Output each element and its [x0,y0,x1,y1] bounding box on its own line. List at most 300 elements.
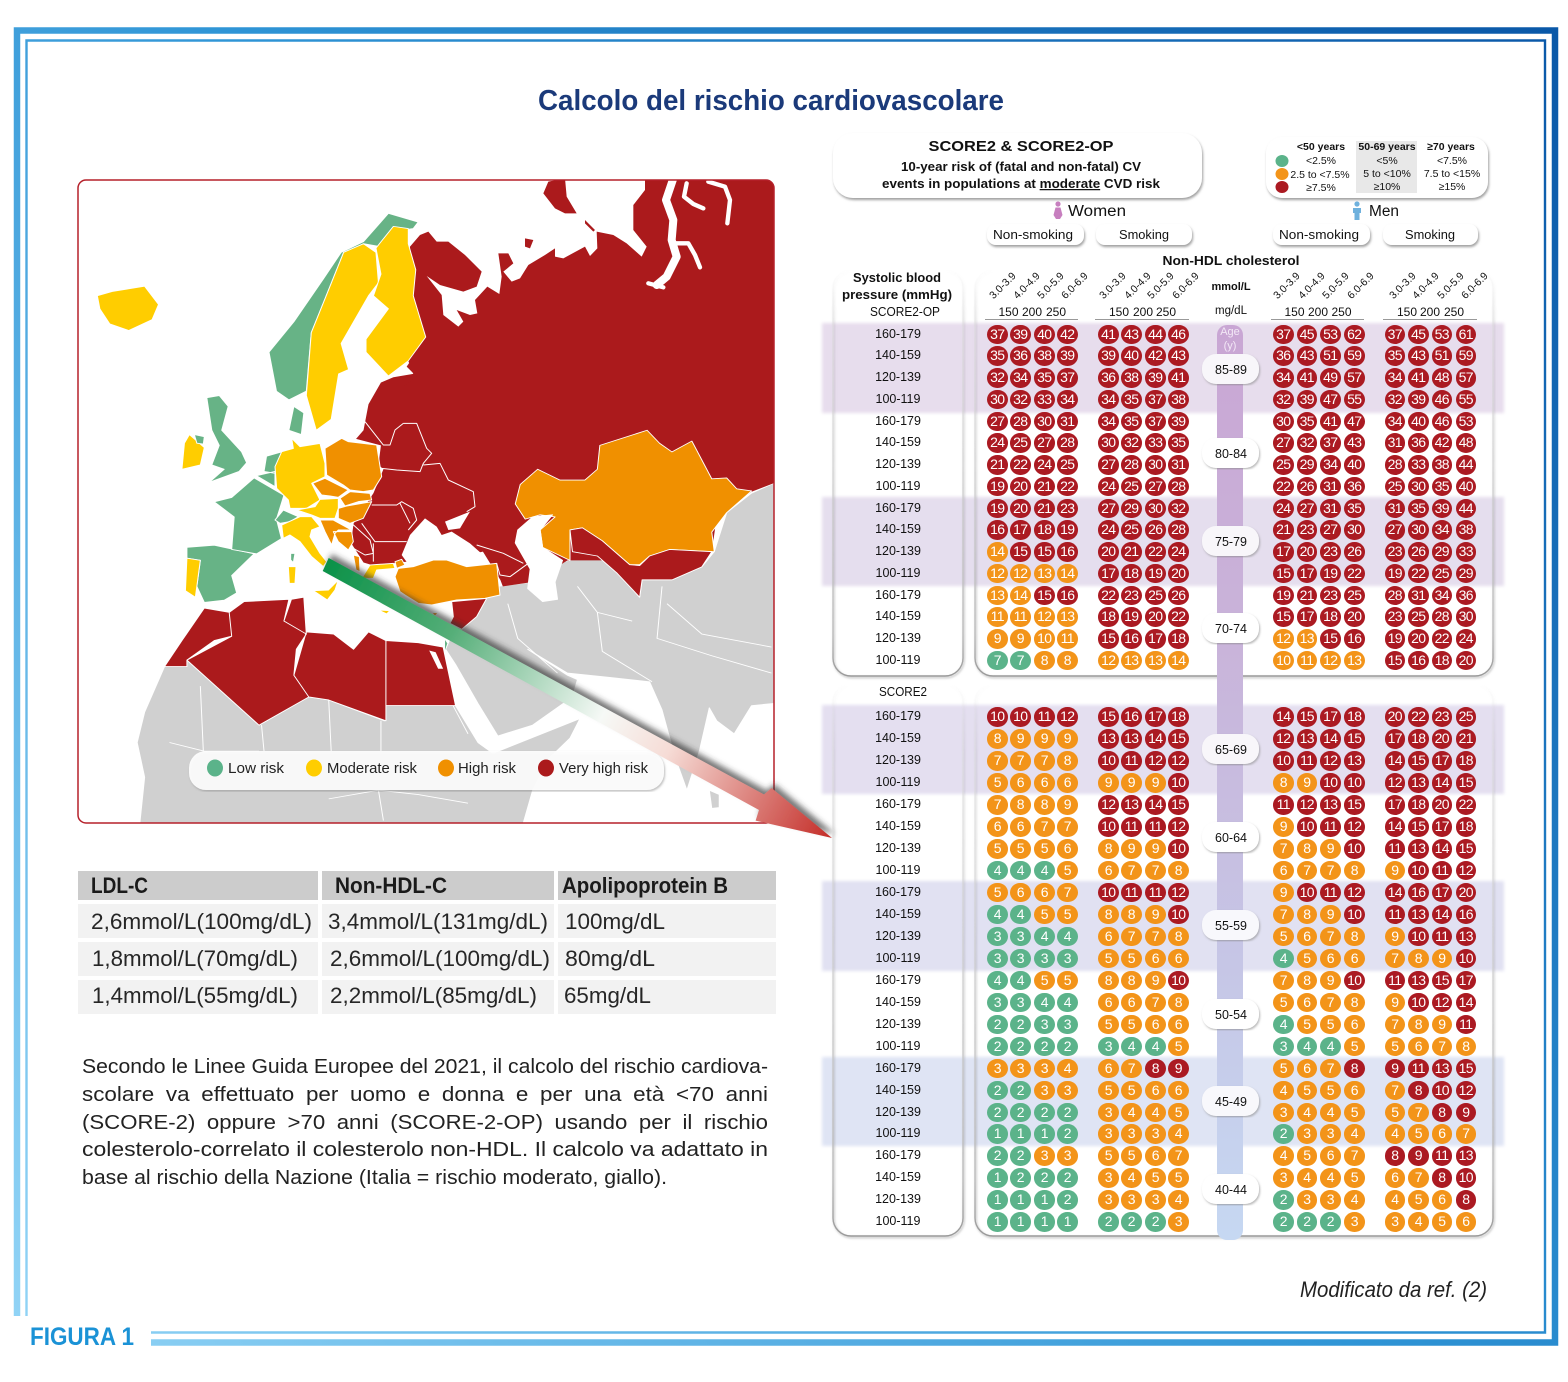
row: age 65-69, 160-179: 20 [1388,708,1402,724]
row: age 60-64, 100-119: 12 [1459,862,1473,878]
row: age 60-64, 120-139: 13 [1411,840,1425,856]
row: age 75-79, 140-159: 19 [1060,521,1074,537]
map legend: Very high risk [559,760,648,777]
row: age 70-74, 120-139: 19 [1388,630,1402,646]
row: age 65-69, 120-139: 10 [1276,752,1290,768]
row: age 55-59, 120-139: 8 [1175,928,1182,944]
row: age 50-54, 160-179 [875,971,1476,990]
row: age 40-44, 140-159: 140-159 [875,1170,921,1184]
row: age 85-89, 140-159 [875,346,1476,366]
row: age 75-79, 120-139: 33 [1459,543,1473,559]
row: age 80-84, 140-159: 43 [1347,434,1361,450]
row: age 60-64, 140-159: 6 [994,818,1001,834]
row: age 50-54, 160-179: 8 [1128,972,1135,988]
row: age 50-54, 120-139: 8 [1415,1016,1422,1032]
cholesterol column axis: 4.0-4.9 [1122,270,1154,302]
row: age 50-54, 100-119: 4 [1303,1038,1310,1054]
row: age 85-89, 160-179: 39 [1013,326,1027,342]
row: age 45-49, 160-179: 8 [1152,1060,1159,1076]
row: age 65-69, 120-139: 10 [1101,752,1115,768]
SCORE2 label: SCORE2 [879,685,927,699]
row: age 85-89, 100-119: 38 [1171,391,1185,407]
Corsica [291,554,294,562]
row: age 45-49, 100-119: 6 [1438,1125,1445,1141]
row: age 65-69, 140-159: 140-159 [875,731,921,745]
row: age 70-74, 100-119: 20 [1459,652,1473,668]
row: age 60-64, 100-119 [876,861,1476,880]
row: age 65-69, 120-139 [875,751,1476,771]
row: age 50-54, 140-159: 8 [1351,994,1358,1010]
cholesterol column axis: 4.0-4.9 [1296,270,1328,302]
cholesterol column axis: 3.0-3.9 [1097,270,1129,302]
row: age 50-54, 160-179: 10 [1347,972,1361,988]
row: age 55-59, 140-159: 4 [1017,906,1024,922]
row: age 75-79, 140-159: 26 [1148,521,1162,537]
row: age 65-69, 160-179: 10 [990,708,1004,724]
row: age 80-84, 160-179: 30 [1037,412,1051,428]
row: age 50-54, 100-119: 8 [1462,1038,1469,1054]
row: age 60-64, 140-159: 11 [1324,818,1337,834]
row: age 65-69, 120-139: 14 [1388,752,1402,768]
row: age 80-84, 100-119: 31 [1323,478,1337,494]
map: European risk regions [97,178,777,825]
row: age 65-69, 160-179: 11 [1038,708,1051,724]
row: age 70-74, 120-139: 15 [1101,630,1115,646]
row: age 75-79, 140-159: 140-159 [875,522,921,536]
row: age 65-69, 160-179: 15 [1101,708,1115,724]
row: age 55-59, 160-179: 17 [1435,884,1449,900]
row: age 60-64, 160-179: 8 [1017,796,1024,812]
row: age 80-84, 120-139: 28 [1388,456,1402,472]
row: age 55-59, 140-159: 9 [1327,906,1334,922]
row: age 85-89, 120-139: 57 [1459,369,1473,385]
row: age 70-74, 140-159: 11 [991,608,1004,624]
row: age 80-84, 120-139: 25 [1276,456,1290,472]
cholesterol column axis: 250 [1444,305,1464,319]
lipid targets table: 2,6mmol/L(100mg/dL) [330,946,550,971]
Syria [450,598,487,629]
row: age 55-59, 140-159: 8 [1128,906,1135,922]
row: age 55-59, 100-119: 5 [1105,950,1112,966]
row: age 85-89, 140-159: 35 [1388,347,1402,363]
row: age 40-44, 120-139: 3 [1128,1191,1135,1207]
row: age 60-64, 100-119: 7 [1303,862,1310,878]
row: age 75-79, 160-179: 31 [1323,500,1337,516]
Central Asia red [570,528,712,597]
row: age 55-59, 100-119: 6 [1351,950,1358,966]
systolic pressure axis title: Systolic blood [853,271,941,285]
lipid targets table: Apolipoprotein B [562,873,728,898]
row: age 80-84, 120-139: 25 [1060,456,1074,472]
Kazakhstan [515,430,752,565]
row: age 45-49, 100-119: 2 [1280,1125,1287,1141]
row: age 40-44, 100-119: 6 [1462,1213,1469,1229]
row: age 50-54, 100-119: 4 [1128,1038,1135,1054]
row: age 60-64, 120-139: 5 [1017,840,1024,856]
chart header box: SCORE2 & SCORE2-OP [928,138,1114,155]
row: age 65-69, 100-119: 6 [1017,774,1024,790]
row: age 40-44, 160-179: 8 [1391,1147,1398,1163]
row: age 70-74, 140-159: 15 [1276,608,1290,624]
row: age 85-89, 140-159: 35 [990,347,1004,363]
risk colour legend: ≥10% [1374,181,1400,193]
explanatory paragraph [82,1055,768,1189]
row: age 70-74, 120-139: 12 [1276,630,1290,646]
row: age 60-64, 140-159: 9 [1280,818,1287,834]
row: age 40-44, 120-139: 1 [994,1191,1001,1207]
row: age 80-84, 120-139: 21 [990,456,1004,472]
risk colour legend [1266,137,1488,198]
grey land and southern Russia base [137,337,774,825]
row: age 75-79, 140-159: 21 [1276,521,1290,537]
row: age 60-64, 100-119: 7 [1128,862,1135,878]
row: age 50-54, 120-139: 6 [1351,1016,1358,1032]
explanatory paragraph: (SCORE-2) oppure >70 anni (SCORE-2-OP) usando per il rischio [82,1111,768,1134]
row: age 55-59, 160-179: 7 [1064,884,1071,900]
row: age 50-54, 140-159: 5 [1280,994,1287,1010]
row: age 65-69, 160-179: 15 [1300,708,1314,724]
row: age 50-54, 140-159: 7 [1327,994,1334,1010]
row: age 70-74, 120-139: 9 [1017,630,1024,646]
row: age 85-89, 140-159: 59 [1347,347,1361,363]
row: age 50-54, 160-179: 13 [1411,972,1425,988]
row: age 85-89, 100-119: 55 [1459,391,1473,407]
row: age 45-49, 160-179: 3 [994,1060,1001,1076]
lipid targets table: LDL-C [91,873,148,898]
row: age 45-49, 140-159: 8 [1415,1082,1422,1098]
row: age 80-84, 140-159: 32 [1300,434,1314,450]
row: age 75-79, 120-139: 26 [1347,543,1361,559]
row: age 45-49, 140-159: 6 [1152,1082,1159,1098]
row: age 65-69, 100-119: 9 [1303,774,1310,790]
row: age 75-79, 100-119: 15 [1276,565,1290,581]
row: age 55-59, 140-159: 11 [1388,906,1401,922]
row: age 40-44, 100-119: 4 [1415,1213,1422,1229]
row: age 85-89, 160-179: 46 [1171,326,1185,342]
row: age 45-49, 100-119: 4 [1351,1125,1358,1141]
row: age 60-64, 120-139: 9 [1128,840,1135,856]
row: age 50-54, 140-159: 8 [1175,994,1182,1010]
cholesterol column axis: mmol/L [1211,281,1251,293]
row: age 70-74, 100-119: 11 [1300,652,1313,668]
row: age 80-84, 140-159: 31 [1388,434,1402,450]
row: age 75-79, 160-179: 19 [990,500,1004,516]
row: age 40-44, 160-179: 7 [1175,1147,1182,1163]
row: age 60-64, 100-119: 11 [1435,862,1448,878]
row: age 70-74, 100-119: 18 [1435,652,1449,668]
row: age 55-59, 120-139: 7 [1128,928,1135,944]
row: age 40-44, 160-179: 6 [1152,1147,1159,1163]
row: age 40-44, 120-139: 1 [1041,1191,1048,1207]
row: age 75-79, 100-119: 12 [990,565,1004,581]
row: age 45-49, 120-139: 4 [1327,1104,1334,1120]
row: age 50-54, 140-159: 9 [1391,994,1398,1010]
row: age 45-49, 160-179: 8 [1351,1060,1358,1076]
row: age 80-84, 140-159: 33 [1148,434,1162,450]
row: age 45-49, 140-159: 3 [1064,1082,1071,1098]
shaded age bands [822,323,1504,1146]
row: age 45-49, 140-159: 5 [1105,1082,1112,1098]
row: age 45-49, 120-139: 7 [1415,1104,1422,1120]
row: age 60-64, 160-179: 22 [1459,796,1473,812]
row: age 80-84, 120-139: 30 [1148,456,1162,472]
row: age 50-54, 160-179: 15 [1435,972,1449,988]
row: age 70-74, 140-159: 13 [1060,608,1074,624]
row: age 65-69, 100-119: 100-119 [876,775,920,789]
row: age 65-69, 140-159: 9 [1041,730,1048,746]
row: age 55-59, 120-139: 4 [1041,928,1048,944]
row: age 65-69, 160-179: 18 [1171,708,1185,724]
row: age 40-44, 140-159: 2 [1064,1169,1071,1185]
row: age 40-44, 140-159: 4 [1327,1169,1334,1185]
row: age 85-89, 100-119: 30 [990,391,1004,407]
row: age 45-49, 160-179: 13 [1435,1060,1449,1076]
row: age 80-84, 100-119: 25 [1124,478,1138,494]
row: age 55-59, 100-119: 9 [1438,950,1445,966]
row: age 55-59, 120-139: 120-139 [875,929,921,943]
row: age 55-59, 160-179: 6 [1041,884,1048,900]
Portugal [185,558,200,597]
row: age 85-89, 160-179: 61 [1459,326,1473,342]
row: age 65-69, 120-139: 7 [1017,752,1024,768]
row: age 45-49, 100-119 [876,1124,1476,1144]
row: age 55-59, 100-119: 3 [1064,950,1071,966]
row: age 80-84, 160-179: 41 [1323,412,1337,428]
row: age 85-89, 160-179: 37 [1276,326,1290,342]
row: age 80-84, 140-159: 140-159 [875,435,921,449]
Germany [275,438,325,508]
risk colour legend: 2.5 to <7.5% [1290,169,1350,181]
row: age 50-54, 160-179: 9 [1152,972,1159,988]
row: age 50-54, 100-119: 2 [994,1038,1001,1054]
row: age 65-69, 120-139: 12 [1148,752,1162,768]
row: age 75-79, 120-139: 14 [990,543,1004,559]
row: age 85-89, 140-159: 51 [1435,347,1449,363]
row: age 80-84, 160-179: 35 [1124,412,1138,428]
row: age 40-44, 100-119 [876,1212,1476,1232]
row: age 50-54, 160-179: 8 [1303,972,1310,988]
row: age 80-84, 160-179: 34 [1101,412,1115,428]
row: age 70-74, 120-139: 16 [1347,630,1361,646]
row: age 80-84, 100-119: 21 [1037,478,1051,494]
row: age 70-74, 120-139: 15 [1323,630,1337,646]
row: age 45-49, 100-119: 7 [1462,1125,1469,1141]
row: age 80-84, 100-119: 30 [1411,478,1425,494]
row: age 75-79, 120-139: 17 [1276,543,1290,559]
row: age 50-54, 100-119: 3 [1280,1038,1287,1054]
row: age 45-49, 100-119: 3 [1105,1125,1112,1141]
row: age 80-84, 100-119: 100-119 [876,479,920,493]
row: age 85-89, 100-119: 35 [1124,391,1138,407]
row: age 80-84, 120-139: 27 [1101,456,1115,472]
row: age 65-69, 100-119: 12 [1388,774,1402,790]
row: age 70-74, 160-179: 23 [1323,586,1337,602]
chart header box: 10-year risk of (fatal and non-fatal) CV [901,160,1142,174]
row: age 65-69, 140-159: 18 [1411,730,1425,746]
row: age 70-74, 160-179: 25 [1347,586,1361,602]
age group pills: 85-89 [1215,363,1247,377]
row: age 60-64, 160-179: 15 [1347,796,1361,812]
row: age 45-49, 120-139: 3 [1105,1104,1112,1120]
row: age 70-74, 140-159 [875,607,1476,627]
row: age 60-64, 140-159: 12 [1347,818,1361,834]
row: age 60-64, 100-119: 100-119 [876,863,920,877]
row: age 70-74, 120-139: 17 [1148,630,1162,646]
row: age 50-54, 100-119: 6 [1415,1038,1422,1054]
row: age 55-59, 100-119: 6 [1152,950,1159,966]
row: age 75-79, 160-179: 31 [1388,500,1402,516]
row: age 85-89, 140-159: 38 [1037,347,1051,363]
row: age 75-79, 120-139: 15 [1013,543,1027,559]
cholesterol column axis: 250 [1331,305,1352,319]
row: age 60-64, 140-159: 11 [1125,818,1138,834]
row: age 70-74, 140-159: 19 [1124,608,1138,624]
row: age 80-84, 160-179: 27 [990,412,1004,428]
explanatory paragraph: colesterolo-correlato il colesterolo non-HDL. Il calcolo va adattato in [82,1138,768,1161]
row: age 80-84, 120-139 [875,455,1476,475]
row: age 60-64, 160-179: 12 [1101,796,1115,812]
row: age 65-69, 140-159: 9 [1017,730,1024,746]
row: age 60-64, 140-159: 12 [1171,818,1185,834]
row: age 55-59, 160-179: 160-179 [875,885,921,899]
row: age 55-59, 140-159 [875,905,1476,924]
cholesterol column axis [985,270,1491,320]
row: age 70-74, 120-139 [875,629,1476,649]
row: age 85-89, 140-159: 43 [1171,347,1185,363]
row: age 65-69, 120-139: 11 [1125,752,1138,768]
source note: Modificato da ref. (2) [1300,1277,1487,1302]
row: age 70-74, 140-159: 20 [1148,608,1162,624]
row: age 55-59, 140-159: 10 [1171,906,1185,922]
row: age 80-84, 160-179: 40 [1411,412,1425,428]
row: age 50-54, 140-159: 10 [1411,994,1425,1010]
row: age 70-74, 140-159: 18 [1323,608,1337,624]
row: age 50-54, 100-119: 2 [1041,1038,1048,1054]
risk colour legend: 50-69 years [1358,141,1416,153]
row: age 40-44, 100-119: 3 [1391,1213,1398,1229]
row: age 60-64, 140-159: 6 [1017,818,1024,834]
row: age 55-59, 120-139: 4 [1064,928,1071,944]
row: age 85-89, 160-179: 160-179 [875,326,921,340]
row: age 85-89, 100-119: 34 [1060,391,1074,407]
row: age 70-74, 100-119: 14 [1171,652,1185,668]
row: age 45-49, 160-179: 5 [1280,1060,1287,1076]
row: age 50-54, 100-119: 5 [1175,1038,1182,1054]
row: age 70-74, 100-119: 13 [1347,652,1361,668]
row: age 50-54, 160-179: 9 [1327,972,1334,988]
row: age 45-49, 160-179: 3 [1041,1060,1048,1076]
row: age 75-79, 100-119: 19 [1323,565,1337,581]
row: age 70-74, 120-139: 120-139 [875,631,921,645]
row: age 80-84, 100-119: 25 [1388,478,1402,494]
row: age 60-64, 100-119: 7 [1152,862,1159,878]
row: age 40-44, 100-119: 2 [1303,1213,1310,1229]
row: age 80-84, 100-119: 35 [1435,478,1449,494]
row: age 55-59, 120-139: 10 [1411,928,1425,944]
row: age 80-84, 100-119: 20 [1013,478,1027,494]
row: age 55-59, 100-119: 3 [994,950,1001,966]
row: age 55-59, 100-119: 6 [1175,950,1182,966]
title: Calcolo del rischio cardiovascolare [538,85,1004,117]
row: age 50-54, 120-139: 120-139 [875,1017,921,1031]
cholesterol column axis: 5.0-5.9 [1145,270,1177,302]
row: age 45-49, 120-139 [875,1103,1476,1122]
row: age 45-49, 140-159: 140-159 [875,1082,921,1096]
row: age 70-74, 160-179: 36 [1459,586,1473,602]
row: age 50-54, 120-139: 4 [1280,1016,1287,1032]
central Europe, Balkans and Turkey [275,422,528,650]
row: age 45-49, 120-139: 5 [1391,1104,1398,1120]
row: age 55-59, 120-139: 3 [994,928,1001,944]
row: age 45-49, 100-119: 1 [1017,1125,1024,1141]
row: age 70-74, 140-159: 30 [1459,608,1473,624]
row: age 65-69, 140-159: 14 [1323,730,1337,746]
row: age 80-84, 100-119: 24 [1101,478,1115,494]
row: age 80-84, 160-179 [875,412,1476,431]
row: age 60-64, 100-119: 7 [1327,862,1334,878]
cholesterol column axis: 150 [1109,305,1129,319]
row: age 45-49, 120-139: 4 [1128,1104,1135,1120]
Ireland [182,435,204,469]
row: age 45-49, 120-139: 4 [1303,1104,1310,1120]
row: age 50-54, 100-119: 5 [1391,1038,1398,1054]
row: age 85-89, 160-179: 45 [1411,326,1425,342]
row: age 85-89, 120-139: 120-139 [875,370,921,384]
cholesterol column axis: 5.0-5.9 [1435,270,1467,302]
row: age 75-79, 140-159: 27 [1388,521,1402,537]
row: age 50-54, 120-139: 3 [1064,1016,1071,1032]
row: age 40-44, 100-119: 2 [1327,1213,1334,1229]
row: age 60-64, 140-159: 18 [1459,818,1473,834]
row: age 50-54, 100-119: 4 [1152,1038,1159,1054]
Italy, Sardinia, Sicily, Greece, Crete [282,517,395,614]
row: age 40-44, 100-119: 5 [1438,1213,1445,1229]
row: age 40-44, 140-159: 4 [1303,1169,1310,1185]
row: age 55-59, 100-119: 3 [1017,950,1024,966]
row: age 45-49, 160-179: 9 [1391,1060,1398,1076]
row: age 80-84, 140-159: 37 [1323,434,1337,450]
row: age 60-64, 140-159 [875,817,1476,837]
risk colour legend: <7.5% [1437,155,1467,167]
row: age 65-69, 120-139: 120-139 [875,753,921,767]
row: age 80-84, 160-179: 160-179 [875,414,921,428]
row: age 45-49, 100-119: 5 [1415,1125,1422,1141]
lipid targets table: 3,4mmol/L(131mg/dL) [328,909,548,934]
row: age 40-44, 140-159: 4 [1128,1169,1135,1185]
row: age 65-69, 160-179: 16 [1124,708,1138,724]
row: age 85-89, 100-119: 33 [1037,391,1051,407]
row: age 85-89, 100-119: 55 [1347,391,1361,407]
row: age 50-54, 140-159: 4 [1041,994,1048,1010]
row: age 40-44, 140-159: 5 [1351,1169,1358,1185]
row: age 65-69, 100-119: 9 [1152,774,1159,790]
row: age 45-49, 140-159: 4 [1280,1082,1287,1098]
row: age 40-44, 160-179: 6 [1327,1147,1334,1163]
Iceland [97,286,159,330]
row: age 55-59, 100-119: 8 [1415,950,1422,966]
row: age 85-89, 160-179: 42 [1060,326,1074,342]
row: age 85-89, 120-139: 34 [1388,369,1402,385]
row: age 70-74, 160-179: 26 [1171,586,1185,602]
row: age 65-69, 160-179: 14 [1276,708,1290,724]
row: age 40-44, 120-139: 6 [1438,1191,1445,1207]
row: age 55-59, 140-159: 5 [1041,906,1048,922]
row: age 65-69, 120-139: 7 [1041,752,1048,768]
row: age 55-59, 160-179 [875,883,1476,902]
row: age 75-79, 160-179: 23 [1060,500,1074,516]
cholesterol column axis: 5.0-5.9 [1320,270,1352,302]
row: age 50-54, 120-139: 6 [1152,1016,1159,1032]
